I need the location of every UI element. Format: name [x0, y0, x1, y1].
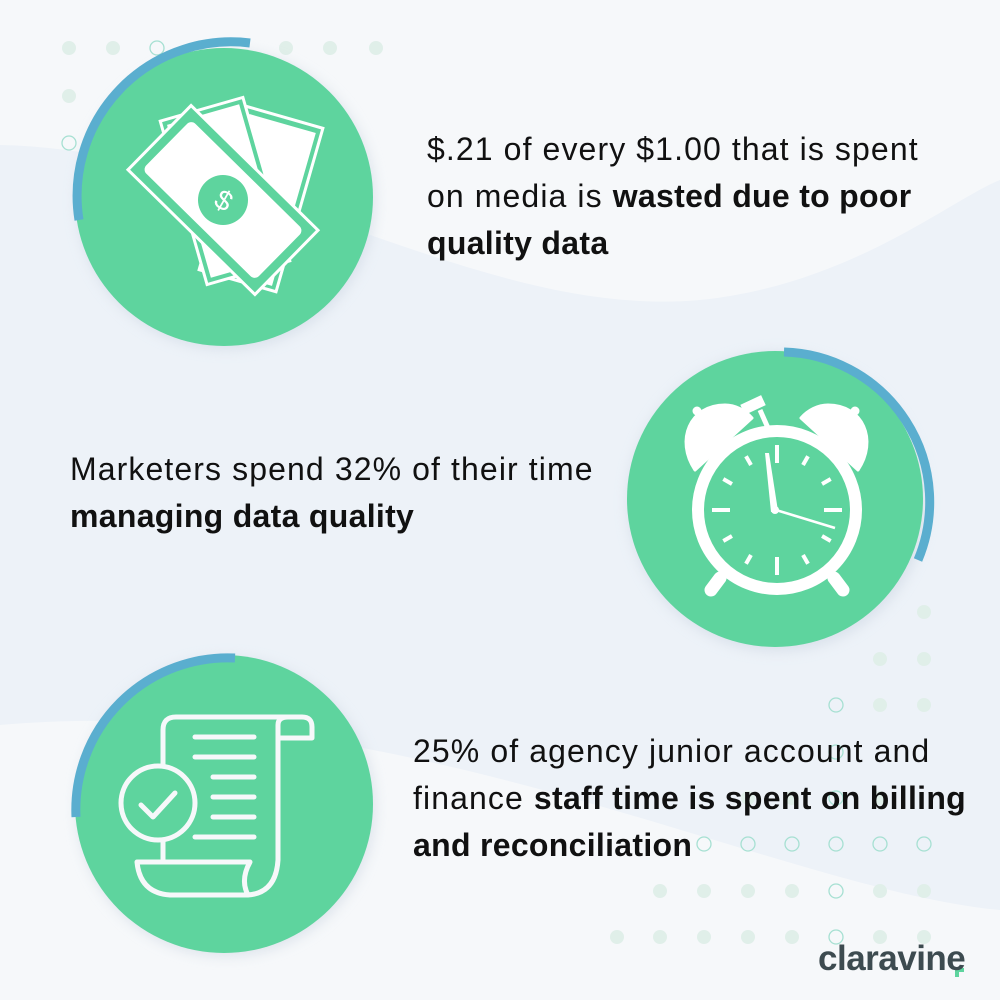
- text block: media waste stat: $.21 of every $1.00 that is spent: [427, 131, 919, 167]
- text block: marketers time stat: managing data quality: [70, 498, 414, 534]
- text block: billing stat: and reconciliation: [413, 827, 692, 863]
- icon: receipt circle: [75, 655, 376, 957]
- text block: media waste stat: on media is wasted due to poor: [427, 178, 911, 214]
- logo mark: [955, 968, 964, 977]
- text block: billing stat: 25% of agency junior account and: [413, 733, 930, 769]
- text block: marketers time stat: [70, 451, 594, 534]
- logo: claravine: claravine: [818, 939, 965, 978]
- icon: money circle: [75, 42, 376, 350]
- dots: top-left grid: [62, 41, 383, 150]
- text block: marketers time stat: Marketers spend 32% of their time: [70, 451, 594, 487]
- text block: media waste stat: quality data: [427, 225, 608, 261]
- text block: billing stat: finance staff time is spent on billing: [413, 780, 966, 816]
- text block: billing stat: [413, 733, 966, 863]
- icon: alarm clock circle: [627, 351, 930, 652]
- dots: bottom-right grid: [610, 605, 931, 944]
- text block: media waste stat: [427, 131, 919, 261]
- icon: money circle: $: [209, 183, 239, 218]
